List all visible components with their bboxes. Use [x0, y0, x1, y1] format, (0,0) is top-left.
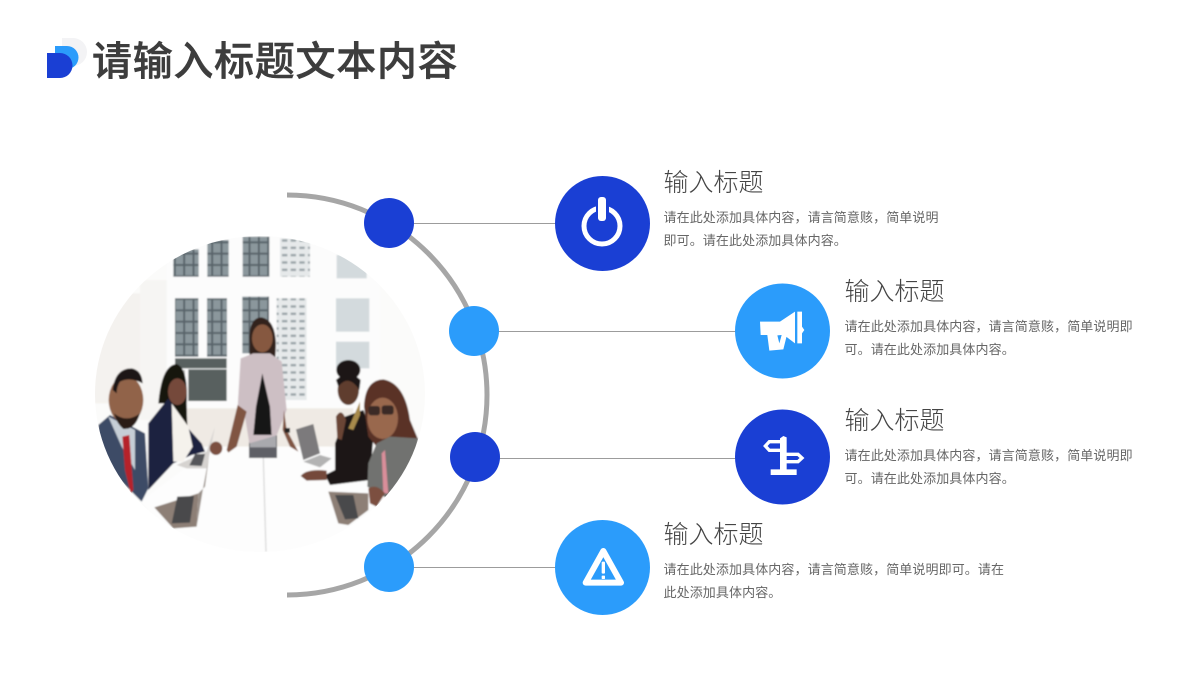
- person: standing woman: [227, 317, 298, 453]
- node dot 4: [364, 542, 414, 592]
- node dot 1: [364, 198, 414, 248]
- text block 1: 即可。请在此处添加具体内容。: [664, 233, 847, 248]
- text block 4: 输入标题: [664, 521, 764, 549]
- node dot 2: [449, 306, 499, 356]
- text block 3: 可。请在此处添加具体内容。: [844, 471, 1015, 486]
- text block 2: 请在此处添加具体内容，请言简意赅，简单说明即: [844, 319, 1133, 334]
- text block 4: 请在此处添加具体内容，请言简意赅，简单说明即可。请在: [664, 562, 1004, 577]
- person: woman in navy jacket: [148, 364, 222, 490]
- person: woman with glasses: [364, 379, 418, 507]
- icon: megaphone: [735, 284, 830, 378]
- connector line 1: [412, 222, 557, 224]
- text block 4: [664, 521, 1004, 600]
- icon: signpost: [735, 410, 830, 504]
- text block 3: 输入标题: [844, 407, 945, 435]
- person: woman with black top: [301, 360, 373, 485]
- text block 2: 输入标题: [844, 278, 945, 306]
- photo: team meeting: [90, 230, 430, 555]
- text block 2: [844, 278, 1133, 357]
- connector line 4: [412, 566, 557, 568]
- semicircle arc: [287, 195, 487, 595]
- text block 1: 请在此处添加具体内容，请言简意赅，简单说明: [664, 210, 939, 225]
- text block 1: 输入标题: [664, 169, 764, 197]
- person: man with red tie: [98, 368, 148, 502]
- text block 1: [664, 169, 939, 248]
- connector line 3: [498, 458, 737, 460]
- text block 2: 可。请在此处添加具体内容。: [844, 342, 1015, 357]
- text block 3: 请在此处添加具体内容，请言简意赅，简单说明即: [844, 448, 1133, 463]
- node dot 3: [450, 432, 500, 482]
- text block 4: 此处添加具体内容。: [664, 585, 781, 600]
- logo: [47, 38, 87, 78]
- text block 3: [844, 407, 1133, 486]
- connector line 2: [497, 330, 737, 332]
- icon: warning: [555, 520, 650, 615]
- table: [140, 447, 380, 555]
- icon: power: [555, 176, 650, 271]
- title: 请输入标题文本内容: [92, 40, 458, 84]
